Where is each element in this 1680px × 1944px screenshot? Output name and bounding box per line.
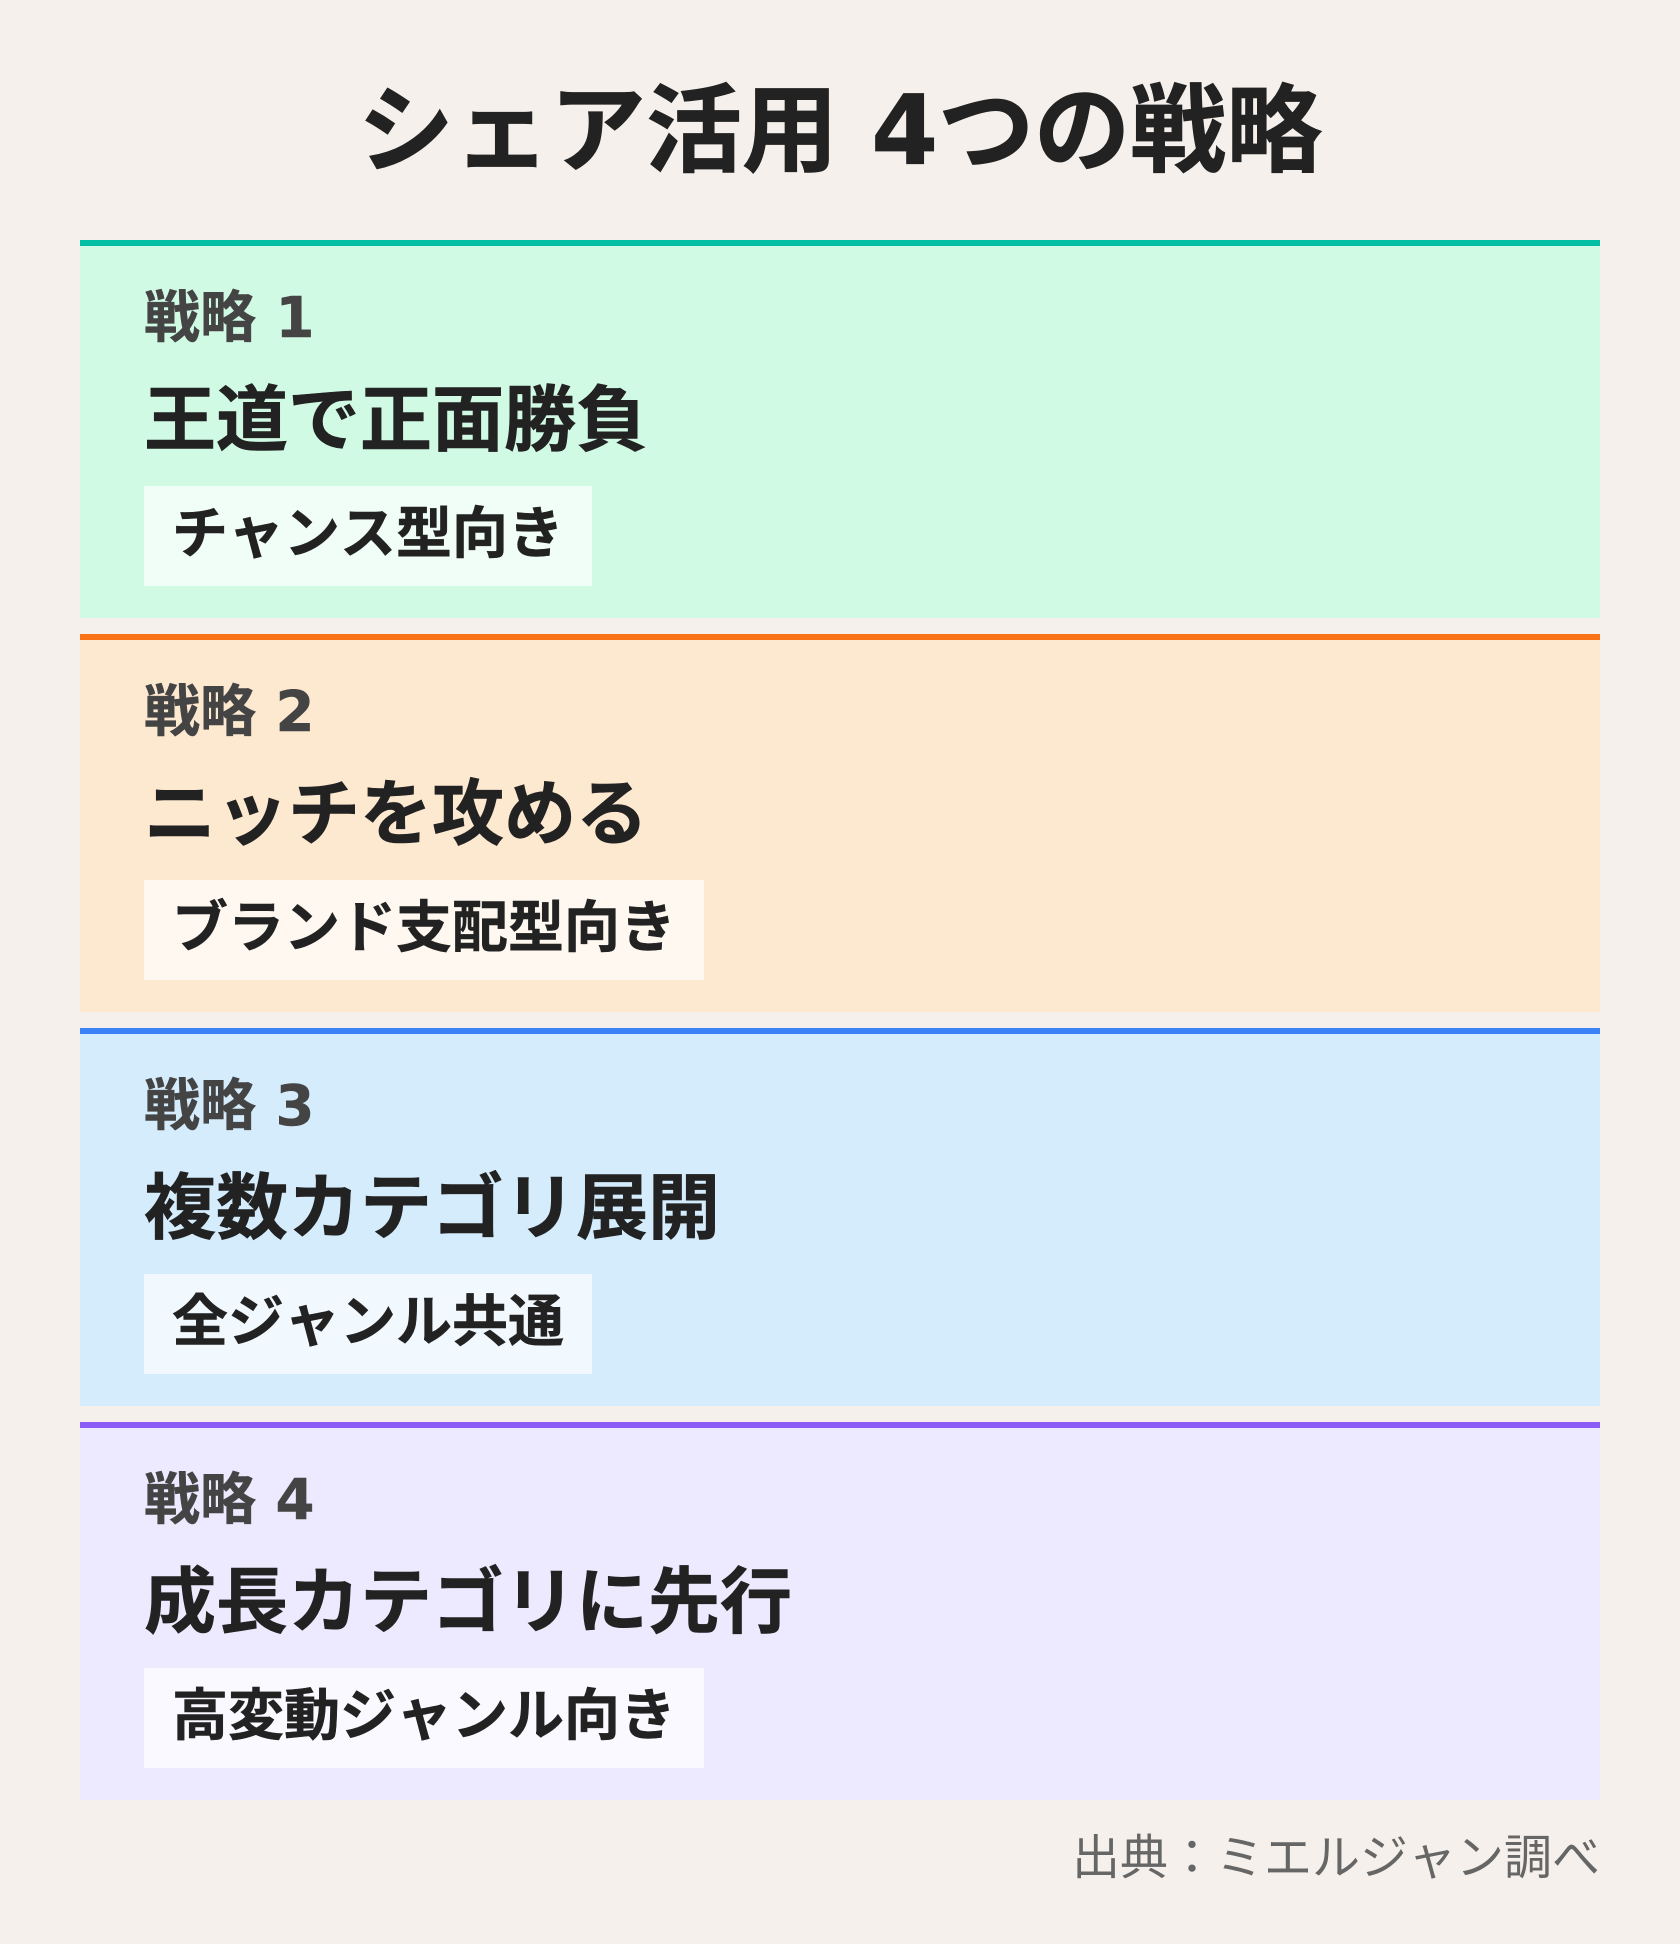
strategy 2 tag (144, 880, 704, 980)
strategy 4 heading: 成長カテゴリに先行 (144, 1560, 792, 1644)
strategy 3 heading: 複数カテゴリ展開 (144, 1166, 720, 1250)
strategy 3 tag (144, 1274, 592, 1374)
strategy 4 tag: 高変動ジャンル向き (172, 1684, 676, 1749)
strategy 3 label: 戦略 3 (144, 1074, 314, 1139)
strategy 4 label: 戦略 4 (144, 1468, 314, 1533)
strategy 1 label: 戦略 1 (144, 286, 314, 351)
strategy 2 tag: ブランド支配型向き (172, 896, 676, 961)
strategy 4 tag (144, 1668, 704, 1768)
panel: strategy 2 (80, 634, 1600, 1012)
strategy 3 tag: 全ジャンル共通 (172, 1290, 564, 1355)
panel: strategy 4 (80, 1422, 1600, 1800)
panel: strategy 3 (80, 1028, 1600, 1406)
strategy 1 tag: チャンス型向き (172, 502, 564, 567)
strategy 2 heading: ニッチを攻める (144, 772, 648, 856)
strategy 1 tag (144, 486, 592, 586)
strategy 2 label: 戦略 2 (144, 680, 314, 745)
panel: strategy 1 (80, 240, 1600, 618)
title: シェア活用 4つの戦略 (358, 75, 1322, 187)
source note: 出典：ミエルジャン調べ (1072, 1830, 1600, 1886)
strategy 1 heading: 王道で正面勝負 (144, 378, 648, 462)
